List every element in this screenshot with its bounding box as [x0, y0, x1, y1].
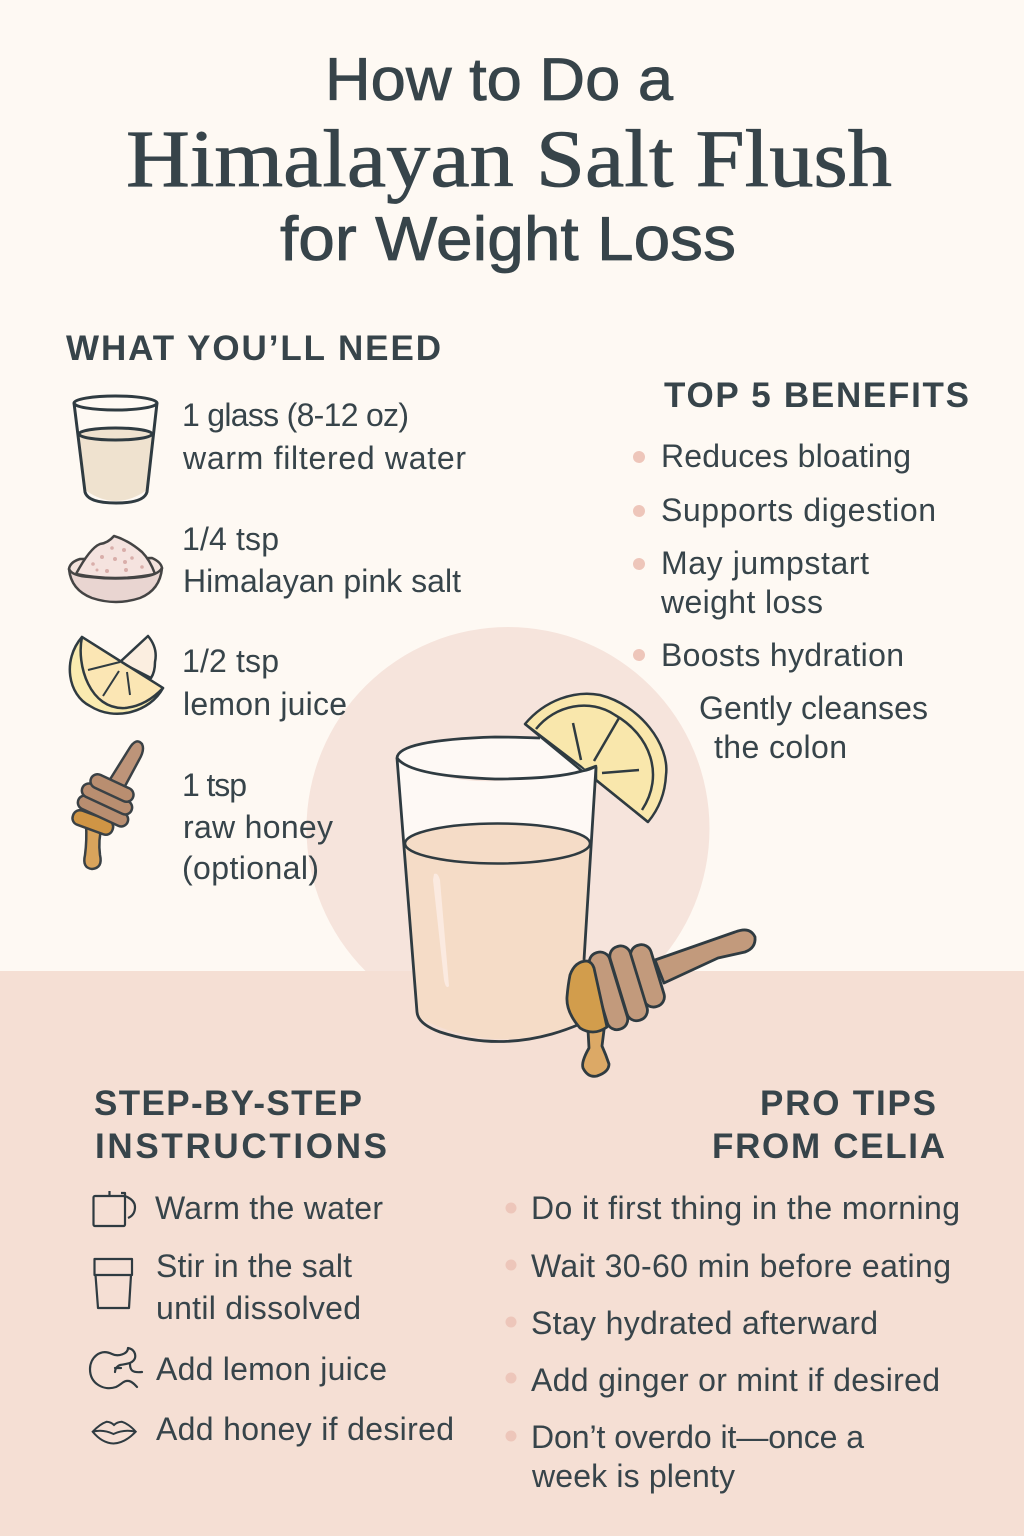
icon: lemon squiggle: [90, 1348, 142, 1388]
text: lemon: 1/2 tsp: [182, 643, 279, 679]
list: pro tips: [506, 1190, 960, 1494]
text: water: 1 glass (8-12 oz): [182, 397, 409, 433]
heading: step-by-step instructions: STEP-BY-STEP: [94, 1084, 362, 1123]
title: for Weight Loss: [280, 205, 736, 274]
step: stir salt: [156, 1248, 361, 1326]
list: pro tips: Wait 30-60 min before eating: [531, 1248, 951, 1284]
list: benefits: Gently cleanses: [699, 690, 928, 726]
list: pro tips: Add ginger or mint if desired: [531, 1362, 940, 1398]
text: salt: [182, 521, 461, 599]
heading: step-by-step instructions: INSTRUCTIONS: [95, 1127, 387, 1166]
illustration: glass with lemon and honey dipper: [397, 694, 755, 1076]
list: benefits: Reduces bloating: [661, 438, 911, 474]
text: water: warm filtered water: [182, 440, 466, 476]
text: lemon: [182, 643, 347, 722]
icon: lemon slice garnish: [525, 694, 666, 822]
text: honey: raw honey: [183, 809, 333, 845]
icon: mug: [94, 1191, 135, 1226]
text: water: [182, 397, 466, 476]
icon: honey dipper: [71, 741, 143, 869]
list: benefits: [633, 438, 936, 765]
text: honey: (optional): [182, 850, 319, 886]
icon: lemon wedges: [70, 636, 163, 714]
icon: bowl of pink salt: [69, 536, 162, 602]
heading: pro tips from celia: [712, 1084, 945, 1166]
text: honey: [182, 767, 333, 886]
heading: top 5 benefits: TOP 5 BENEFITS: [664, 376, 969, 415]
highlight: [433, 874, 449, 987]
step: lemon juice: Add lemon juice: [156, 1351, 387, 1387]
list: pro tips: Stay hydrated afterward: [531, 1305, 878, 1341]
list: benefits: Supports digestion: [661, 492, 936, 528]
heading: pro tips from celia: FROM CELIA: [712, 1127, 945, 1166]
text: salt: 1/4 tsp: [182, 521, 279, 557]
step: stir salt: Stir in the salt: [156, 1248, 352, 1284]
title: Himalayan Salt Flush: [126, 113, 892, 204]
list: benefits: weight loss: [660, 584, 823, 620]
heading: pro tips from celia: PRO TIPS: [760, 1084, 936, 1123]
step: honey: Add honey if desired: [156, 1411, 454, 1447]
step: stir salt: until dissolved: [156, 1290, 361, 1326]
text: salt: Himalayan pink salt: [183, 563, 461, 599]
icon: stirring glass: [94, 1259, 132, 1308]
title: [126, 46, 892, 274]
step: warm water: Warm the water: [155, 1190, 383, 1226]
icon: glass of water: [74, 396, 157, 503]
list: pro tips: week is plenty: [531, 1458, 735, 1494]
list: benefits: the colon: [714, 729, 847, 765]
list: pro tips: Don’t overdo it—once a: [531, 1419, 864, 1455]
icon: lips: [93, 1422, 136, 1444]
list: benefits: Boosts hydration: [661, 637, 904, 673]
glass body and liquid: [405, 843, 590, 1039]
list: pro tips: Do it first thing in the morning: [531, 1190, 960, 1226]
text: honey: 1 tsp: [182, 767, 247, 803]
heading: what you'll need: WHAT YOU’LL NEED: [66, 329, 441, 368]
text: lemon: lemon juice: [183, 686, 347, 722]
heading: step-by-step instructions: [94, 1084, 387, 1166]
icon: large honey dipper: [567, 930, 755, 1076]
list: benefits: May jumpstart: [661, 545, 869, 581]
title: How to Do a: [325, 46, 674, 113]
